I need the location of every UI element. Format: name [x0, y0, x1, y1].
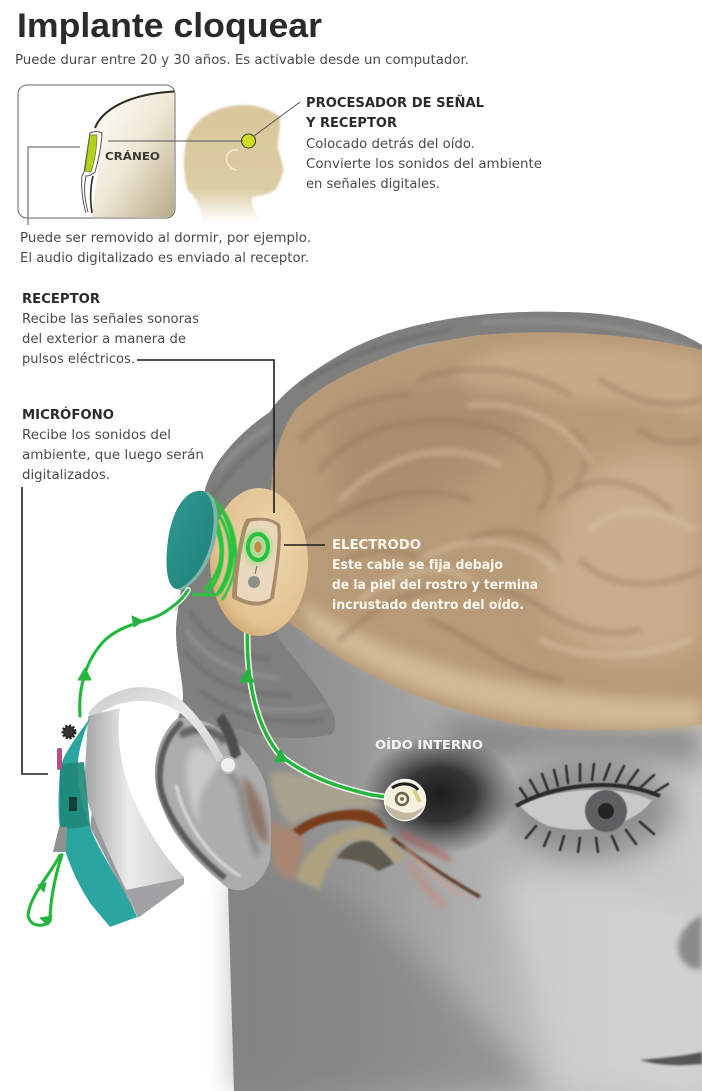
brain	[254, 332, 702, 730]
text block: removal note	[20, 231, 311, 266]
text block: electrodo: ELECTRODO	[332, 538, 421, 553]
icon: gear dial	[63, 726, 75, 738]
icon: microphone button	[69, 797, 77, 811]
eye	[505, 758, 675, 858]
text block: micrófono: MICRÓFONO	[22, 407, 114, 423]
nose edge	[678, 915, 702, 969]
battery tail	[53, 827, 67, 852]
device body	[84, 708, 184, 918]
title: Implante cloquear	[17, 7, 322, 45]
earpiece ring	[220, 757, 236, 773]
cable: receptor to inner ear	[240, 612, 386, 797]
ear canal anatomy	[266, 772, 480, 905]
implant plate	[232, 518, 281, 606]
text block: receptor: del exterior a manera de	[22, 332, 186, 347]
text block: procesador: en señales digitales.	[306, 177, 440, 192]
text block: micrófono: digitalizados.	[22, 468, 110, 483]
hair striations	[175, 330, 450, 721]
text block: receptor: Recibe las señales sonoras	[22, 312, 199, 327]
text block: electrodo: incrustado dentro del oído.	[332, 598, 524, 613]
receiver coil	[242, 529, 272, 565]
text block: receptor	[22, 292, 199, 367]
disc	[210, 488, 308, 636]
text block: procesador: Convierte los sonidos del ambiente	[306, 157, 542, 172]
coil wave	[192, 494, 236, 600]
text block: micrófono: ambiente, que luego serán	[22, 448, 204, 463]
teal case	[58, 718, 137, 927]
label: cráneo: CRÁNEO	[105, 150, 160, 163]
inner ear callout	[375, 737, 483, 820]
text block: electrodo	[332, 538, 538, 613]
ear hook	[88, 687, 225, 762]
text block: procesador	[305, 95, 542, 192]
leader lines: inset	[28, 102, 300, 225]
inner ear dark zone	[362, 735, 518, 855]
text block: removal note: Puede ser removido al dormir, por ejemplo.	[20, 231, 311, 246]
subtitle: Puede durar entre 20 y 30 años. Es activable desde un computador.	[15, 53, 469, 68]
text block: receptor: RECEPTOR	[22, 292, 100, 307]
text block: electrodo: Este cable se fija debajo	[332, 558, 503, 573]
marker: processor position	[242, 134, 256, 148]
text block: micrófono	[22, 407, 204, 483]
scalp rim and temple	[176, 312, 702, 738]
text block: removal note: El audio digitalizado es enviado al receptor.	[20, 251, 309, 266]
text block: procesador: Colocado detrás del oído.	[306, 137, 475, 152]
lower face shading	[234, 875, 540, 1091]
cable: battery loop	[28, 855, 62, 925]
head silhouette	[155, 312, 702, 1091]
cables and arrows	[28, 590, 386, 925]
icon: head silhouette	[184, 105, 283, 222]
transmitter disc	[170, 492, 218, 590]
leader lines: main	[22, 360, 325, 774]
mouth edge	[640, 1052, 702, 1065]
text block: micrófono: Recibe los sonidos del	[22, 428, 171, 443]
text block: electrodo: de la piel del rostro y termina	[332, 578, 538, 593]
head illustration	[155, 312, 702, 1091]
magnet	[248, 576, 260, 588]
icon: pink switch	[57, 748, 62, 770]
text block: procesador: Y RECEPTOR	[305, 116, 397, 131]
receptor implant	[166, 488, 308, 636]
ear	[155, 713, 271, 890]
text block: receptor: pulsos eléctricos.	[22, 352, 135, 367]
label: oído interno: OÍDO INTERNO	[375, 737, 483, 752]
hearing processor	[53, 687, 236, 927]
text block: procesador: PROCESADOR DE SEÑAL	[306, 95, 484, 111]
cable: processor to transmitter	[78, 590, 188, 716]
temple shading	[440, 720, 702, 770]
panel: skull inset	[18, 85, 175, 218]
icon: processor in inset	[85, 135, 97, 172]
